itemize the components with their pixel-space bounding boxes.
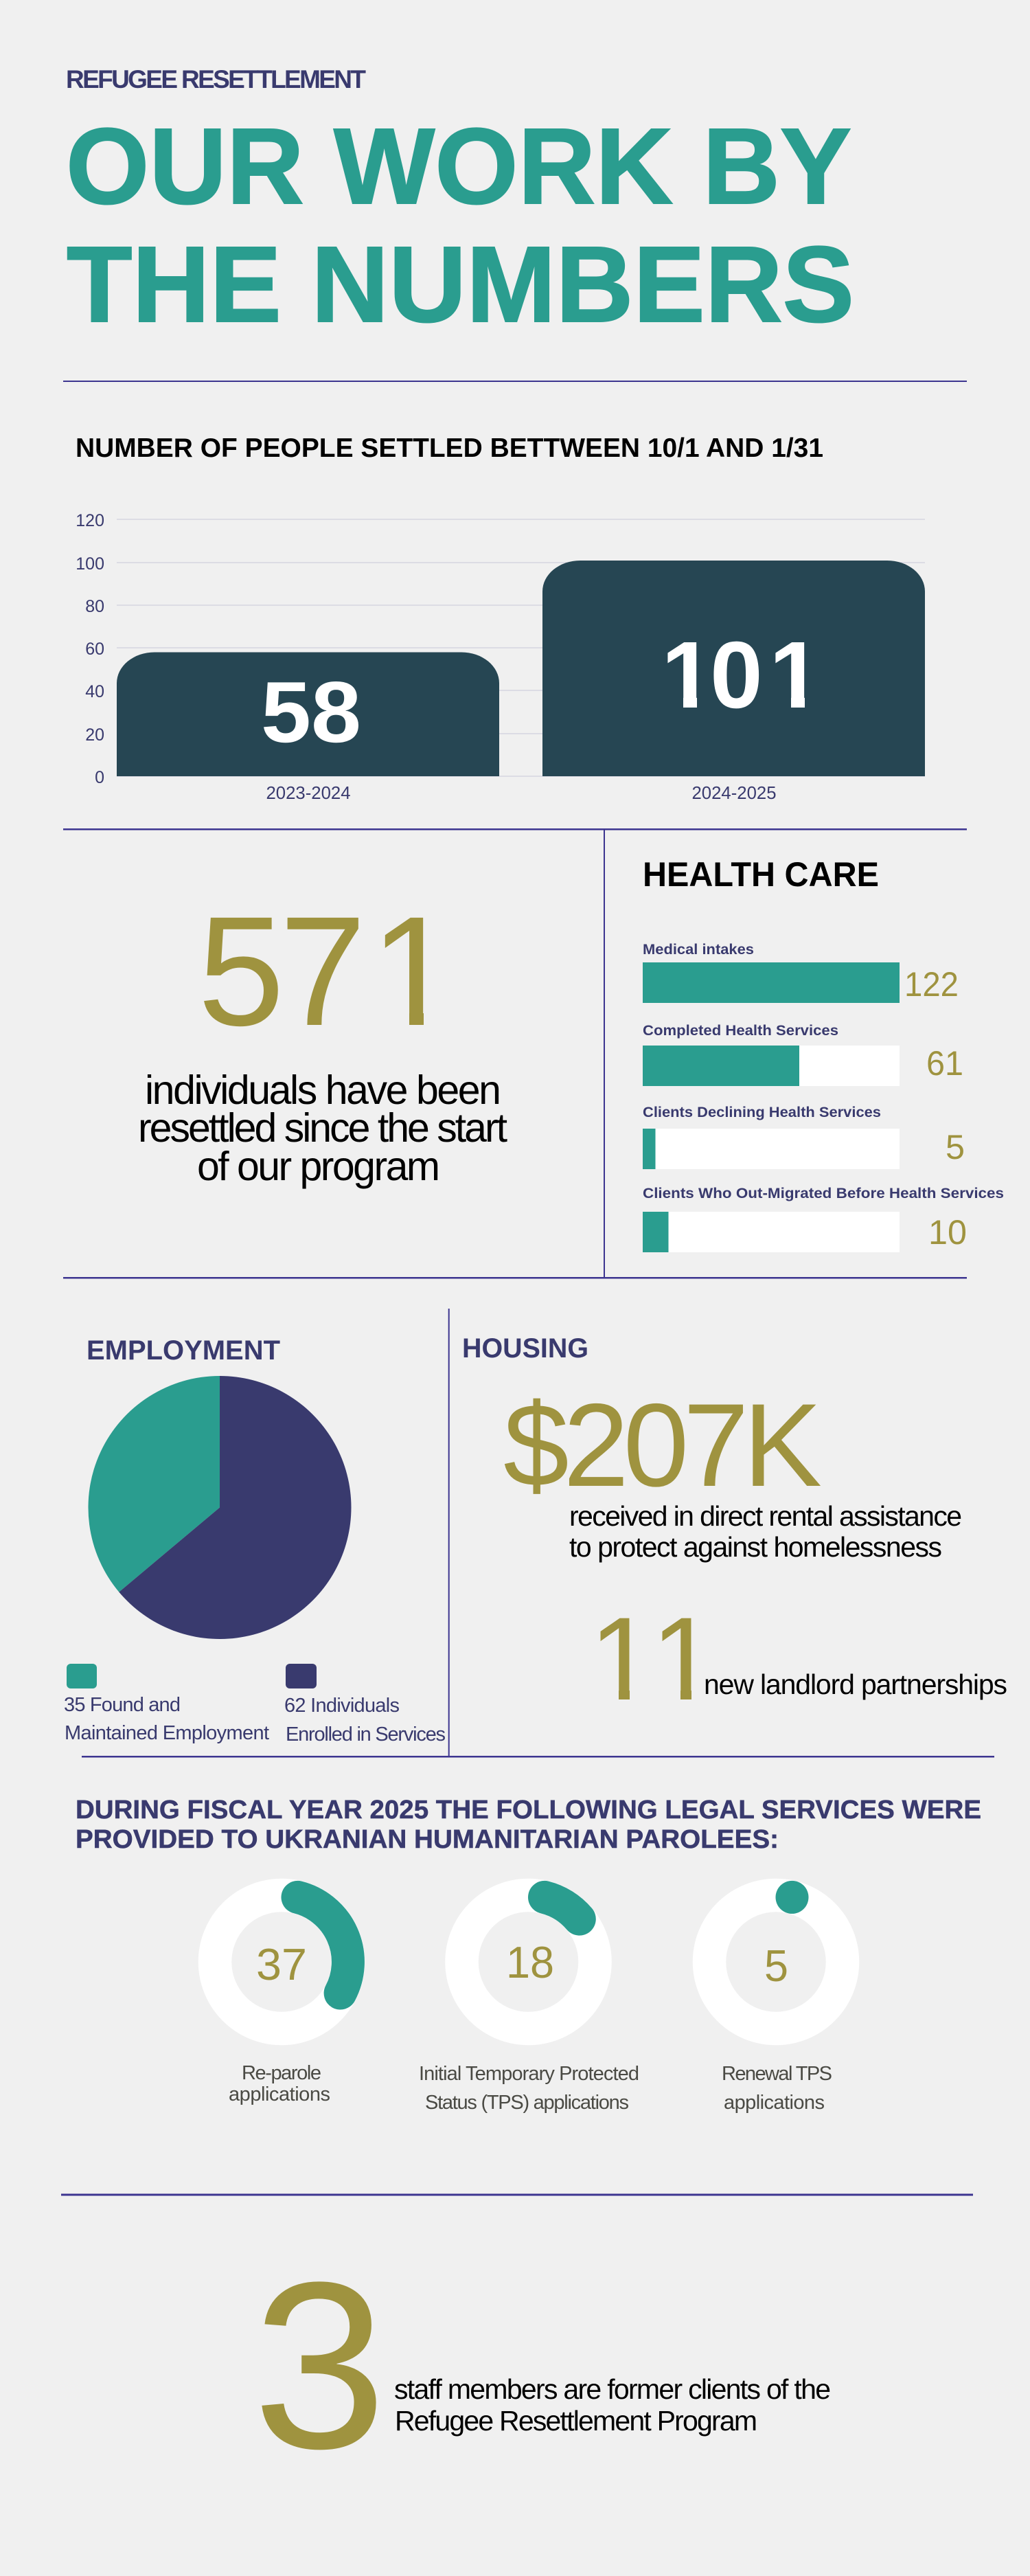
big stat: 571: 571	[198, 885, 457, 1059]
chart x axis labels	[266, 782, 776, 803]
text: individuals resettled	[138, 1067, 507, 1189]
progress bar: medical intakes	[643, 942, 959, 1004]
chart y axis labels: 60	[85, 640, 104, 659]
legend: enrolled in services: 62 Individuals	[284, 1695, 400, 1717]
text: individuals resettled: individuals have been	[145, 1067, 501, 1113]
text: staff members: staff members are former clients of the	[394, 2373, 831, 2405]
title	[66, 106, 854, 345]
progress bar: medical intakes: 122	[904, 965, 959, 1004]
progress bar: clients out-migrated: 10	[928, 1213, 967, 1252]
donut chart: initial TPS applications: Status (TPS) applications	[425, 2092, 629, 2114]
chart y axis labels: 20	[85, 725, 104, 745]
heading: legal services	[76, 1796, 981, 1854]
donut chart: re-parole applications	[215, 1895, 348, 2105]
title: THE NUMBERS	[67, 225, 854, 345]
text: individuals resettled: resettled since the start	[138, 1105, 507, 1151]
donut chart: re-parole applications: Re-parole	[242, 2062, 321, 2084]
heading: legal services: DURING FISCAL YEAR 2025 THE FOLLOWING LEGAL SERVICES WERE	[76, 1796, 981, 1824]
text: staff members	[394, 2373, 831, 2437]
chart x axis labels: 2023-2024	[266, 782, 350, 803]
chart y axis labels: 80	[85, 597, 104, 616]
heading: health care: HEALTH CARE	[643, 855, 879, 894]
donut chart: renewal TPS applications	[709, 1881, 843, 2114]
big stat: 11: 11	[589, 1593, 717, 1725]
panel: housing	[462, 1333, 1007, 1725]
legend: enrolled in services: Enrolled in Services	[286, 1724, 446, 1745]
bar value 58: 58	[261, 664, 361, 760]
bar: 2023-2024	[117, 653, 499, 776]
panel: employment	[64, 1335, 446, 1745]
chart x axis labels: 2024-2025	[692, 782, 776, 803]
legend: found employment	[64, 1664, 269, 1744]
donut chart: initial TPS applications	[419, 1895, 639, 2114]
text: individuals resettled: of our program	[197, 1144, 440, 1189]
progress bar: completed health services: Completed Health Services	[643, 1023, 838, 1039]
heading: legal services: PROVIDED TO UKRANIAN HUMANITARIAN PAROLEES:	[76, 1825, 779, 1854]
legend: enrolled in services	[284, 1664, 446, 1745]
bar: 2024-2025	[542, 561, 925, 776]
progress bar: clients declining: Clients Declining Health Services	[643, 1105, 881, 1120]
text: rental assistance: received in direct rental assistance	[569, 1500, 962, 1532]
text: landlord partnerships: new landlord partnerships	[704, 1669, 1007, 1700]
donut chart: initial TPS applications: Initial Temporary Protected	[419, 2063, 639, 2085]
progress bar: clients out-migrated	[643, 1186, 1004, 1252]
text: rental assistance	[569, 1500, 962, 1563]
text: rental assistance: to protect against homelessness	[569, 1531, 942, 1563]
text: staff members: Refugee Resettlement Program	[395, 2405, 757, 2437]
progress bar: completed health services	[643, 1023, 963, 1086]
progress bar: clients declining: 5	[946, 1128, 965, 1166]
donut chart: renewal TPS applications: applications	[724, 2092, 825, 2114]
chart y axis labels: 100	[76, 554, 104, 574]
big stat: $207K: $207K	[503, 1379, 822, 1511]
pie chart: employment	[88, 1376, 351, 1639]
legend: found employment: 35 Found and	[64, 1694, 181, 1716]
bar chart: people settled	[76, 511, 925, 803]
progress bar: medical intakes: Medical intakes	[643, 942, 754, 958]
big stat: 3: 3	[253, 2233, 387, 2498]
progress bar: clients out-migrated: Clients Who Out-Migrated Before Health Services	[643, 1186, 1004, 1201]
donut chart: renewal TPS applications: 5	[764, 1941, 788, 1991]
chart y axis labels: 40	[85, 682, 104, 701]
donut chart: renewal TPS applications: Renewal TPS	[722, 2063, 832, 2085]
chart y axis labels	[76, 511, 104, 787]
legend: found employment: Maintained Employment	[65, 1722, 269, 1744]
progress bar: completed health services: 61	[926, 1044, 963, 1083]
donut chart: initial TPS applications: 18	[506, 1937, 554, 1987]
heading: people settled chart: NUMBER OF PEOPLE SETTLED BETTWEEN 10/1 AND 1/31	[76, 433, 823, 463]
panel: health care	[643, 855, 1004, 1252]
eyebrow: Refugee Resettlement: REFUGEE RESETTLEMENT	[66, 65, 366, 93]
heading: employment: EMPLOYMENT	[87, 1335, 280, 1366]
donut chart: re-parole applications: applications	[229, 2083, 330, 2105]
progress bar: clients declining	[643, 1105, 965, 1169]
donut chart: re-parole applications: 37	[256, 1939, 307, 1989]
bar value 101: 101	[661, 622, 822, 728]
chart y axis labels: 0	[95, 768, 104, 787]
title: OUR WORK BY	[66, 106, 851, 227]
chart y axis labels: 120	[76, 511, 104, 530]
heading: housing: HOUSING	[462, 1333, 588, 1364]
